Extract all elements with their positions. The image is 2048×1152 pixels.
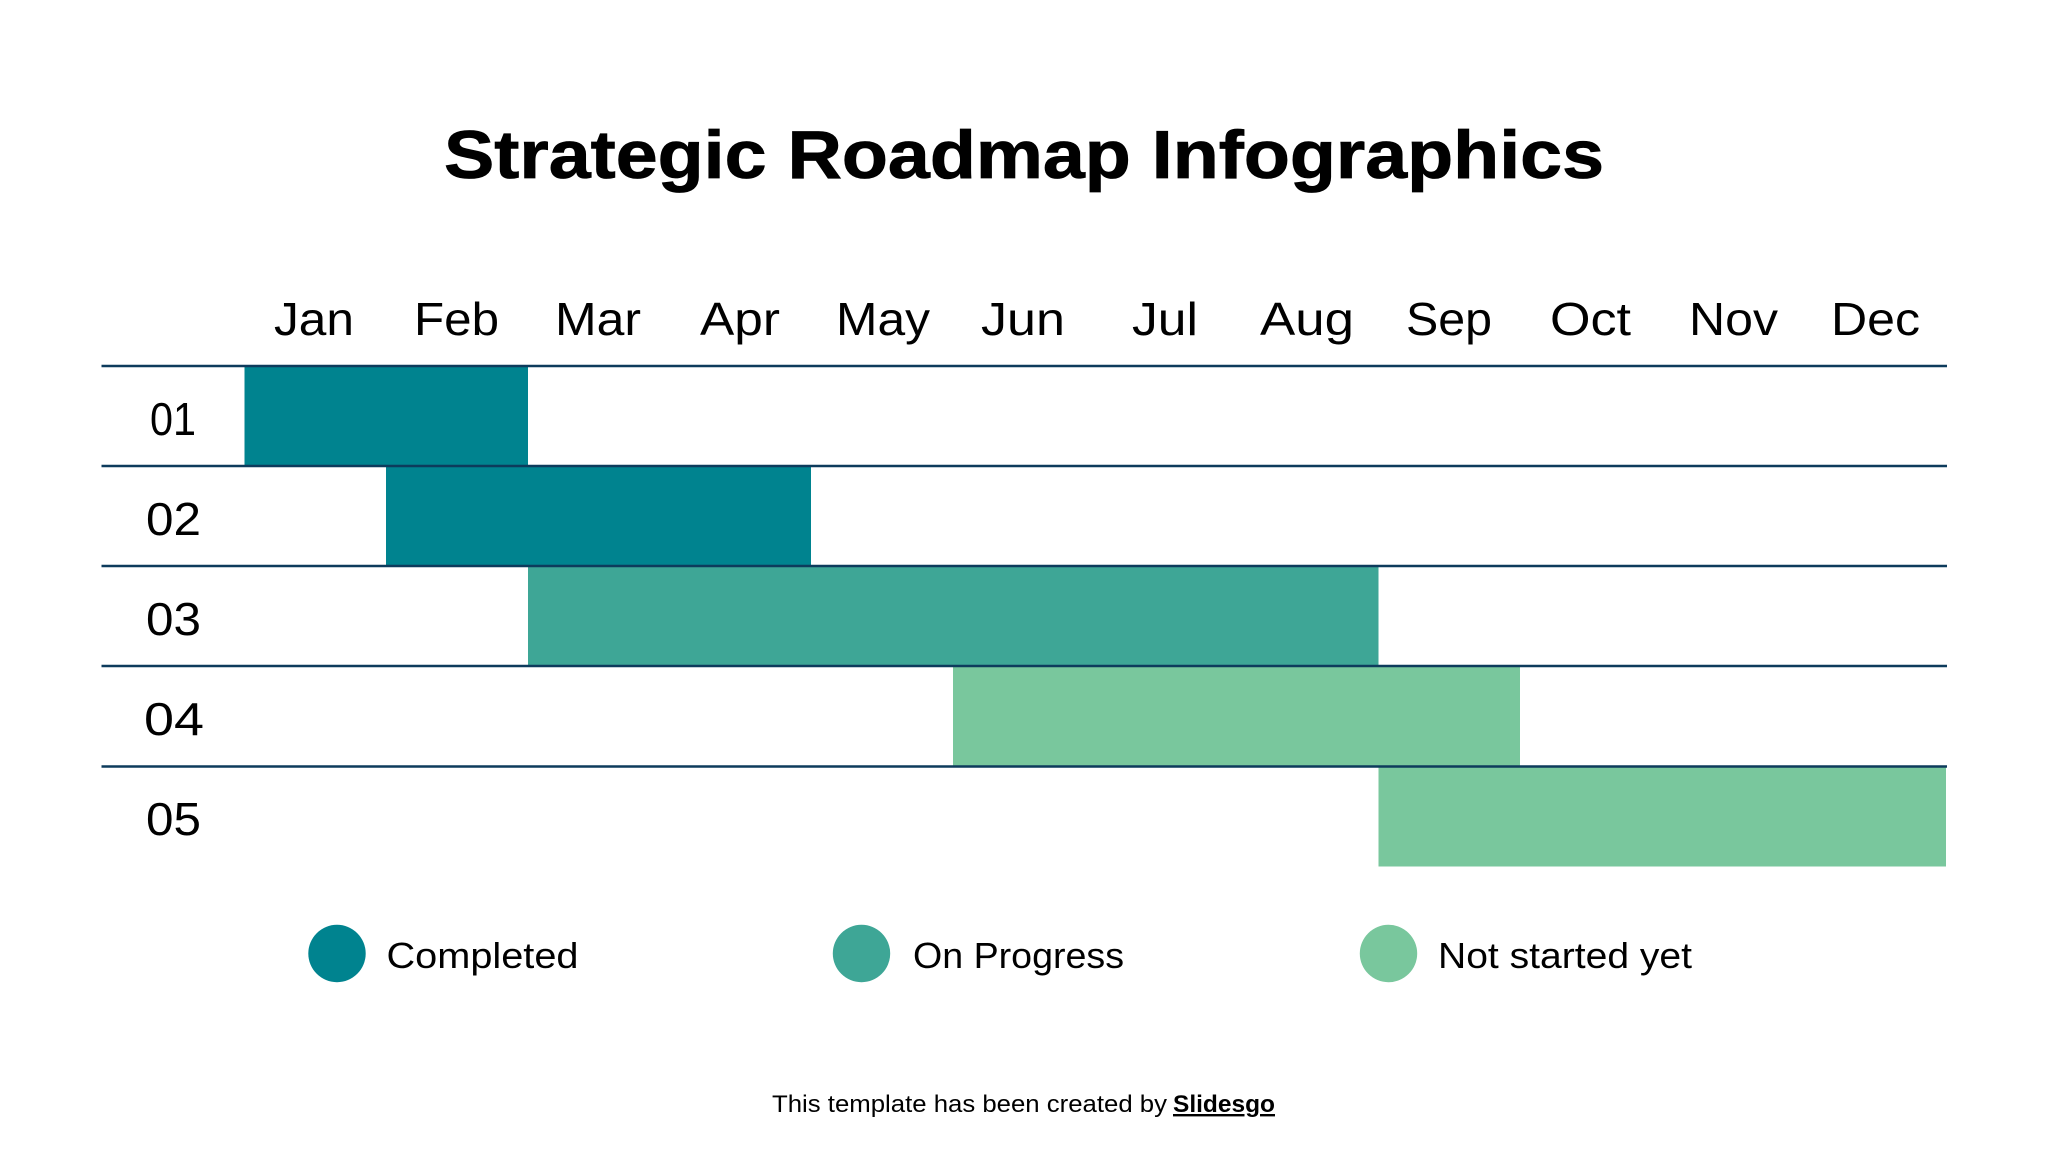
legend item: not started yet (1360, 925, 1692, 982)
gantt bars (244, 366, 1946, 866)
row label 05: 05 (146, 793, 201, 845)
month: Jul: Jul (1132, 293, 1198, 345)
legend (308, 925, 1692, 982)
month: Jan: Jan (274, 293, 354, 345)
bar: row 03 on progress (528, 566, 1378, 666)
footer credit: This template has been created by (772, 1091, 1167, 1118)
month: Dec: Dec (1831, 293, 1920, 345)
legend item: not started yet: Not started yet (1438, 935, 1692, 976)
month: Oct: Oct (1550, 293, 1631, 345)
legend item: on progress (833, 925, 1124, 982)
month: Sep: Sep (1406, 293, 1492, 345)
title: Strategic Roadmap Infographics (444, 117, 1604, 193)
row labels (144, 393, 204, 845)
row label 02: 02 (146, 493, 201, 545)
row label 01: 01 (150, 393, 196, 445)
month: Apr: Apr (700, 293, 780, 345)
legend item: completed: Completed (386, 935, 578, 976)
row label 04: 04 (144, 693, 204, 745)
bar: row 01 completed (244, 366, 528, 466)
legend item: on progress: On Progress (913, 935, 1124, 976)
month: Feb: Feb (414, 293, 499, 345)
legend item: completed (308, 925, 578, 982)
bar: row 02 completed (386, 466, 811, 566)
month: Mar: Mar (555, 293, 641, 345)
bar: row 05 not started (1378, 766, 1946, 866)
month: May: May (836, 293, 930, 345)
bar: row 04 not started (953, 666, 1520, 766)
month header row (274, 293, 1920, 345)
row label 03: 03 (146, 593, 201, 645)
month: Jun: Jun (981, 293, 1065, 345)
footer credit: Slidesgo (1173, 1091, 1275, 1118)
month: Nov: Nov (1689, 293, 1778, 345)
month: Aug: Aug (1260, 293, 1354, 345)
